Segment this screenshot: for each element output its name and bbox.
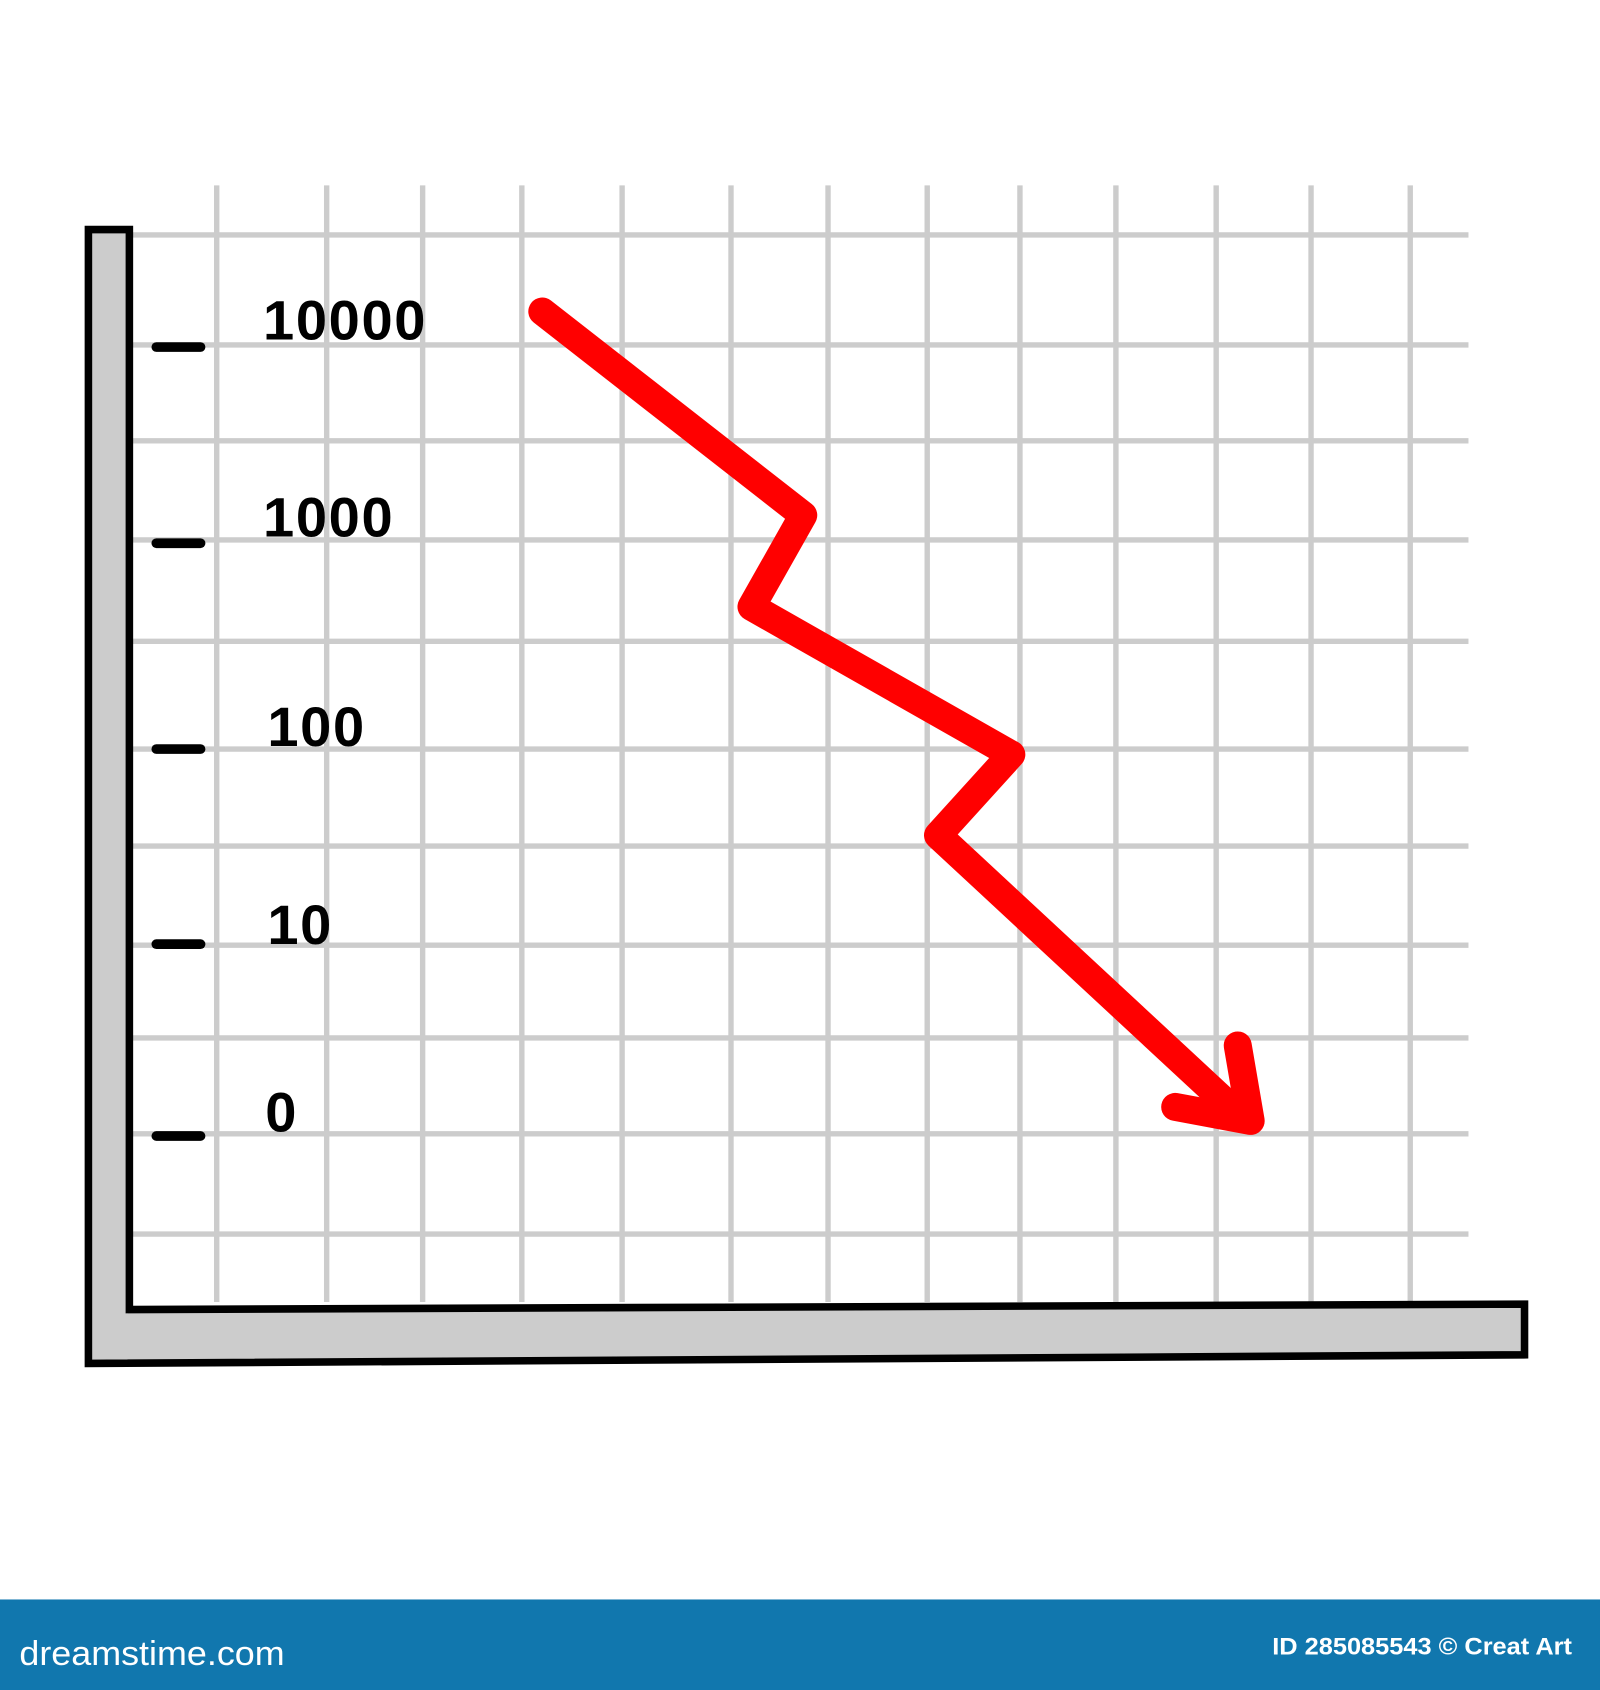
- y-axis ticks and labels: [156, 289, 427, 1144]
- footer bar: ID 285085543 © Creat Art: [1272, 1634, 1572, 1660]
- red trend arrow: [542, 311, 1251, 1121]
- y-axis ticks and labels: 10000: [263, 289, 427, 352]
- y-axis ticks and labels: 1000: [263, 486, 394, 549]
- footer bar: [0, 1599, 1600, 1690]
- y-axis ticks and labels: 10: [267, 893, 333, 956]
- y-axis ticks and labels: 0: [265, 1081, 298, 1144]
- y-axis ticks and labels: 100: [267, 695, 366, 758]
- footer bar: dreamstime.com: [19, 1635, 285, 1673]
- axis: [88, 230, 1525, 1363]
